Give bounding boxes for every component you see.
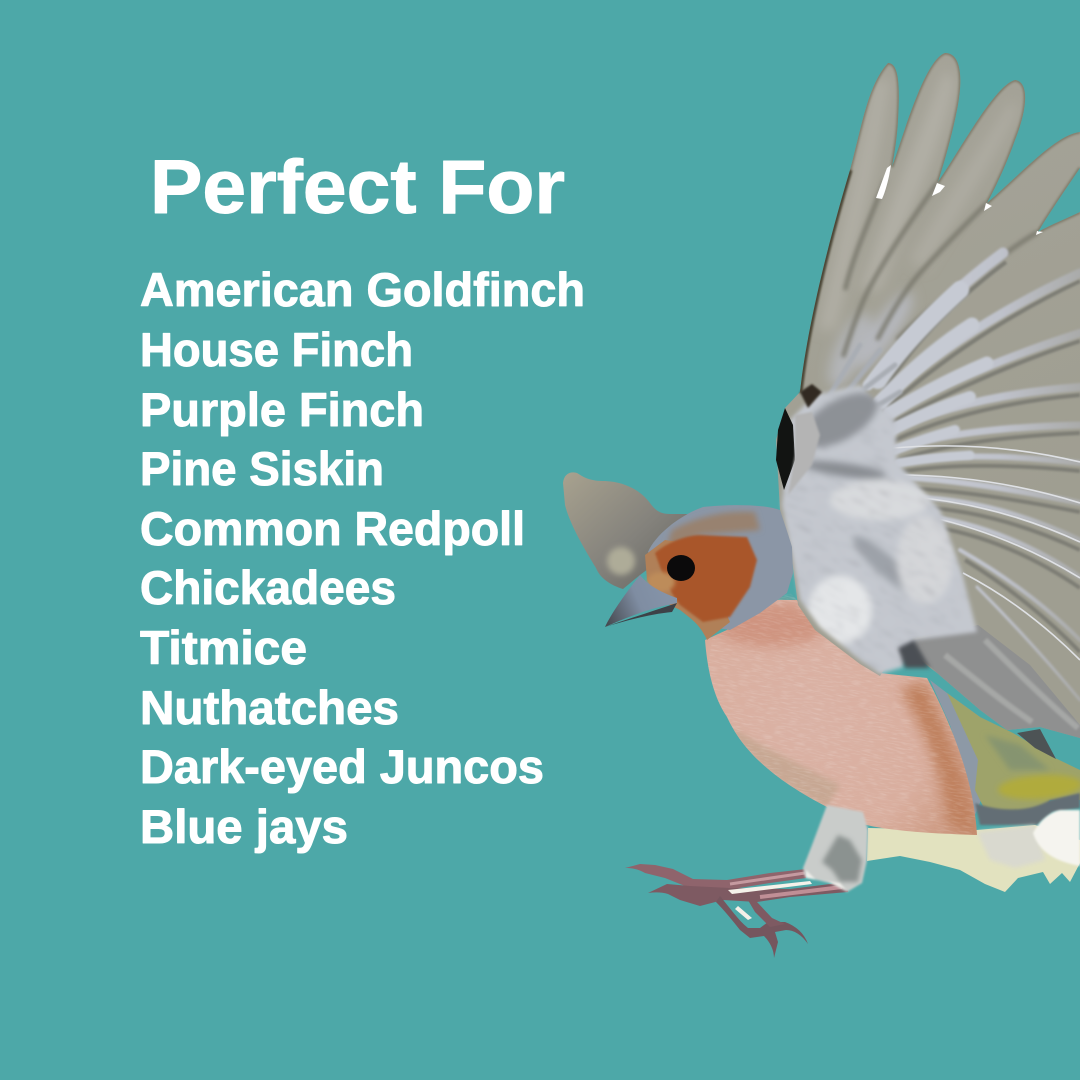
primary soft shading bbox=[822, 80, 1004, 387]
lower mandible bbox=[605, 603, 677, 627]
covert base bbox=[779, 384, 978, 676]
eye bbox=[667, 555, 695, 581]
undertail cream bbox=[867, 825, 1080, 892]
leading edge shadow bbox=[800, 170, 850, 392]
upper mandible bbox=[605, 575, 677, 627]
gray band bbox=[975, 793, 1080, 825]
lower wing light streaks bbox=[945, 640, 1078, 728]
species: Chickadees: Chickadees bbox=[140, 561, 396, 614]
lower leg and toe bbox=[648, 882, 848, 906]
yellow bright patch bbox=[997, 772, 1080, 802]
species: House Finch: House Finch bbox=[140, 323, 413, 376]
face speckle bbox=[647, 572, 675, 592]
dark wing-body shadow bbox=[898, 640, 930, 668]
yellow-green rump bbox=[947, 693, 1080, 820]
flank rust shading bbox=[900, 680, 980, 840]
covert mottling bbox=[806, 390, 952, 646]
white tail bbox=[1033, 810, 1080, 866]
toe highlight bbox=[735, 906, 752, 920]
illustration: finch in flight bbox=[563, 40, 1080, 958]
legs and toes bbox=[625, 864, 848, 958]
species: Titmice: Titmice bbox=[140, 621, 307, 674]
upper leg sheen bbox=[730, 873, 805, 884]
thigh white patch bbox=[806, 870, 846, 890]
short base feather strokes bbox=[830, 345, 900, 410]
species: Purple Finch: Purple Finch bbox=[140, 383, 424, 436]
thigh shading bbox=[822, 835, 862, 882]
feather edge shadow bbox=[800, 53, 1080, 392]
white gap highlight bbox=[728, 881, 812, 894]
shaft shadows bbox=[881, 262, 1080, 652]
breast pale fur bbox=[708, 594, 975, 834]
far wing highlight bbox=[607, 547, 635, 575]
nape and crown bbox=[648, 505, 793, 630]
lower belly shading bbox=[734, 730, 838, 806]
thin white shaft lines bbox=[893, 446, 1080, 660]
thick shaft bases bbox=[878, 290, 987, 463]
feather separators bbox=[843, 180, 1038, 357]
face lower bbox=[645, 540, 730, 640]
lower wing feathers bbox=[905, 625, 1080, 740]
tail and back bbox=[867, 680, 1080, 892]
dark wing root bbox=[800, 384, 822, 408]
species: Common Redpoll: Common Redpoll bbox=[140, 502, 525, 555]
blue-gray flank bbox=[930, 680, 985, 815]
wing coverts bbox=[779, 384, 978, 676]
main wing bbox=[776, 53, 1080, 738]
beak bbox=[605, 575, 677, 627]
upper leg and toe bbox=[625, 864, 806, 890]
dark shoulder patch bbox=[776, 408, 795, 490]
species: Dark-eyed Juncos: Dark-eyed Juncos bbox=[140, 740, 544, 793]
dark under-wing wedge bbox=[1017, 729, 1056, 759]
lower leg sheen bbox=[760, 887, 842, 897]
front toes bbox=[716, 896, 808, 958]
pale tail base bbox=[977, 825, 1045, 868]
bird species list bbox=[140, 263, 585, 853]
shoulder mottling bbox=[788, 412, 820, 495]
species: Pine Siskin: Pine Siskin bbox=[140, 442, 384, 495]
upper rump shade bbox=[985, 735, 1050, 770]
species: American Goldfinch: American Goldfinch bbox=[140, 263, 585, 316]
head bbox=[645, 505, 793, 640]
feather shafts bbox=[868, 253, 1080, 700]
crown rust wash bbox=[665, 512, 760, 550]
body and breast bbox=[705, 594, 977, 835]
title: Perfect For bbox=[150, 145, 565, 230]
species: Nuthatches: Nuthatches bbox=[140, 681, 399, 734]
cheek patch bbox=[655, 535, 757, 622]
feather glints bbox=[876, 165, 1043, 235]
breast base bbox=[705, 600, 977, 835]
wing base colour bbox=[776, 53, 1080, 738]
covert fur bbox=[801, 478, 948, 666]
thigh base bbox=[803, 805, 868, 892]
far wing bbox=[563, 472, 690, 589]
species: Blue jays: Blue jays bbox=[140, 800, 348, 853]
thigh bbox=[803, 805, 868, 892]
upper breast saturated bbox=[715, 603, 825, 647]
second front toe bbox=[745, 895, 785, 927]
